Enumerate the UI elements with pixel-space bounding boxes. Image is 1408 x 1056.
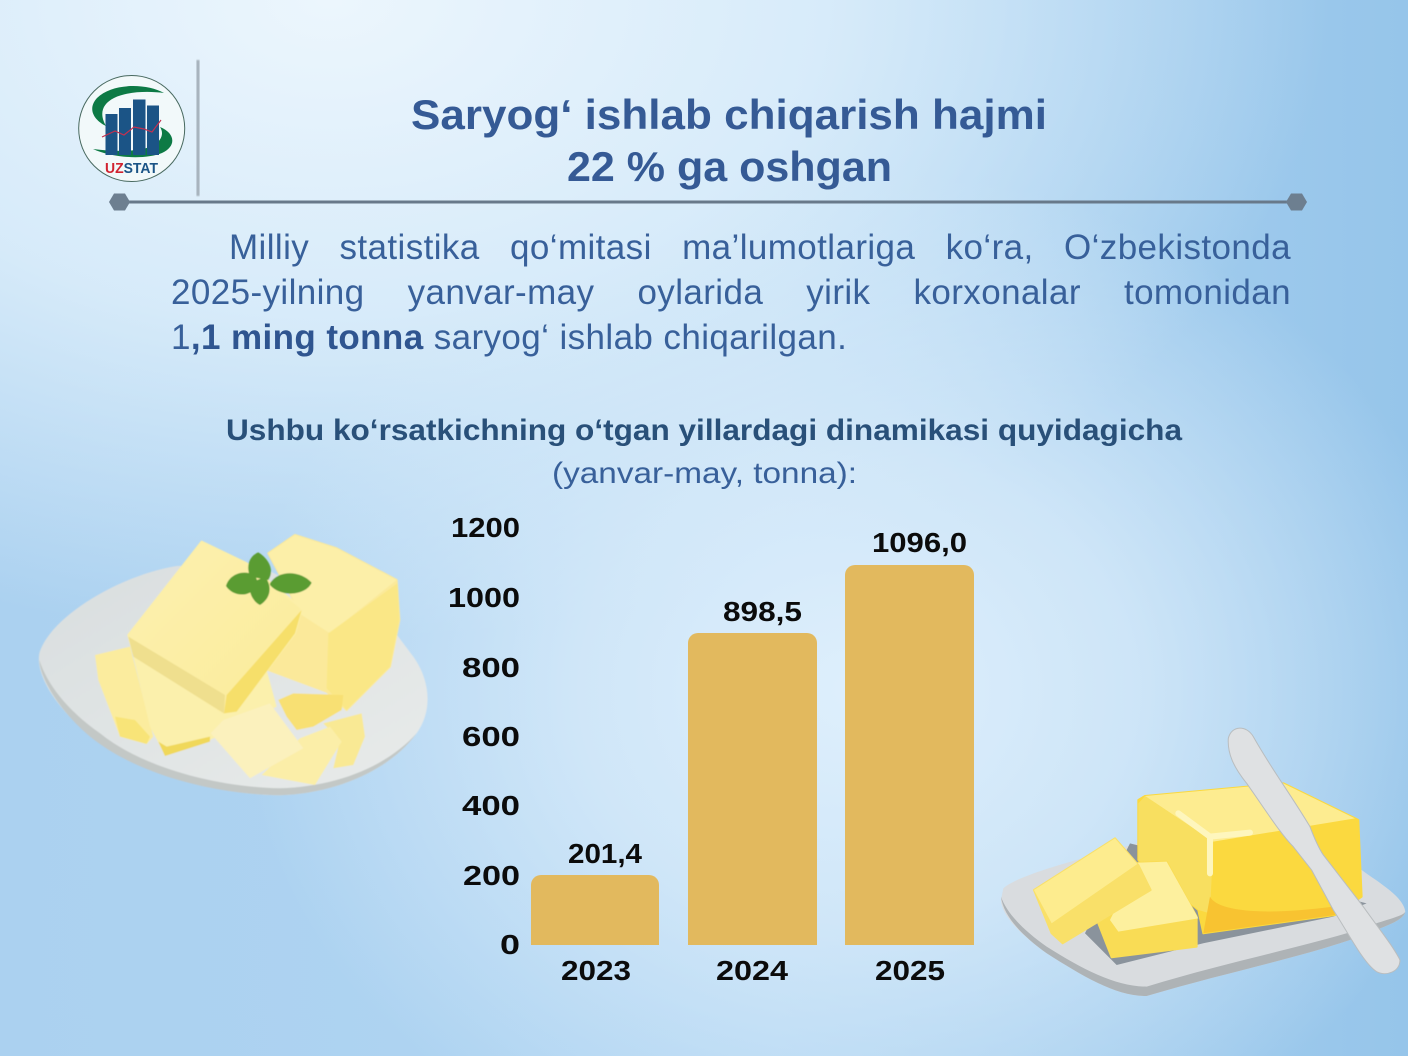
front block	[128, 542, 302, 713]
title	[411, 91, 1047, 190]
chart heading	[226, 414, 1182, 490]
logo: UZSTAT	[78, 75, 186, 182]
y axis labels: 800	[462, 652, 520, 683]
slice 2	[1098, 862, 1197, 957]
knife	[1228, 728, 1400, 974]
y axis labels: 200	[463, 860, 520, 891]
y axis labels: 1200	[451, 512, 520, 543]
value labels	[568, 527, 967, 869]
year labels: 2023	[561, 955, 631, 986]
header rule with hexagon ends	[109, 194, 1307, 210]
intro paragraph: 1,1 ming tonna saryog‘ ishlab chiqarilgan.	[171, 318, 847, 357]
mint leaves	[226, 552, 312, 605]
title: Saryog‘ ishlab chiqarish hajmi	[411, 91, 1047, 138]
year labels	[561, 955, 945, 986]
logo divider	[196, 59, 200, 197]
y axis labels: 1000	[448, 582, 520, 613]
bars	[531, 565, 974, 945]
back block	[268, 535, 399, 710]
butter block	[1138, 783, 1362, 933]
title: 22 % ga oshgan	[567, 143, 892, 190]
y axis labels	[448, 512, 520, 960]
slice 1	[1034, 838, 1151, 943]
dish	[1001, 843, 1405, 996]
y axis labels: 0	[500, 929, 520, 960]
intro paragraph	[171, 228, 1291, 357]
y axis labels: 600	[462, 721, 520, 752]
value labels: 201,4	[568, 838, 642, 869]
slices left	[95, 647, 153, 744]
plate	[39, 563, 428, 795]
logo: UZSTAT: UZSTAT	[105, 160, 158, 177]
year labels: 2024	[716, 955, 788, 986]
y axis labels: 400	[462, 790, 520, 821]
chart heading: Ushbu ko‘rsatkichning o‘tgan yillardagi dinamikasi quyidagicha	[226, 414, 1182, 447]
value labels: 1096,0	[872, 527, 967, 558]
value labels: 898,5	[723, 596, 802, 627]
intro paragraph: Milliy statistika qo‘mitasi ma’lumotlariga ko‘ra, O‘zbekistonda	[229, 228, 1291, 267]
intro paragraph: 2025-yilning yanvar-may oylarida yirik korxonalar tomonidan	[171, 273, 1291, 312]
year labels: 2025	[875, 955, 945, 986]
chart heading: (yanvar-may, tonna):	[552, 457, 857, 490]
small pieces	[278, 693, 343, 730]
